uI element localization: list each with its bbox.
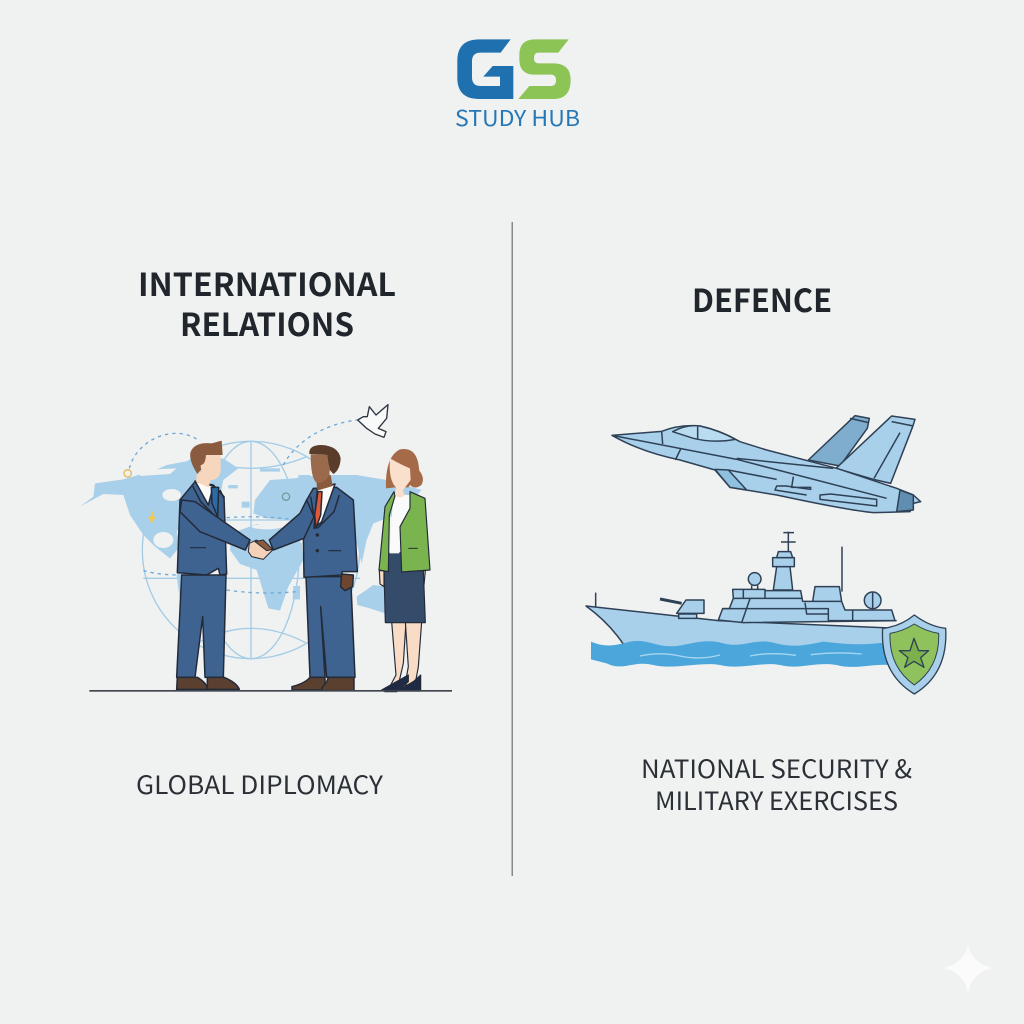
dashed flight routes — [129, 420, 357, 593]
heading: Defence: DEFENCE — [692, 276, 832, 322]
shield emblem — [882, 615, 946, 694]
figure: man left — [177, 441, 250, 689]
sea waves — [591, 641, 890, 667]
figure: man right — [269, 445, 357, 691]
fighter jet — [612, 416, 921, 513]
figure: woman — [379, 449, 430, 692]
warship — [586, 532, 900, 650]
world map — [80, 458, 422, 613]
heading: International Relations: INTERNATIONAL — [138, 260, 396, 306]
ground line — [89, 690, 452, 692]
icon: corner sparkle — [943, 944, 993, 993]
heading: International Relations: RELATIONS — [180, 300, 354, 346]
globe wireframe — [142, 441, 360, 659]
illustration: fighter jet, warship and shield — [586, 416, 946, 694]
caption: Global Diplomacy: GLOBAL DIPLOMACY — [136, 766, 384, 802]
centre divider — [512, 222, 513, 876]
logo: GS Study Hub — [455, 39, 580, 133]
caption: National Security and Military Exercises: MILITARY EXERCISES — [655, 782, 898, 818]
handshake — [248, 540, 273, 559]
caption: National Security and Military Exercises — [641, 750, 912, 818]
caption: National Security and Military Exercises: NATIONAL SECURITY & — [641, 750, 912, 786]
map pins — [124, 470, 131, 477]
icon: peace dove — [358, 405, 388, 437]
illustration: global diplomacy scene — [80, 405, 452, 692]
logo: GS Study Hub: STUDY HUB — [455, 101, 580, 133]
heading: International Relations — [138, 260, 396, 346]
